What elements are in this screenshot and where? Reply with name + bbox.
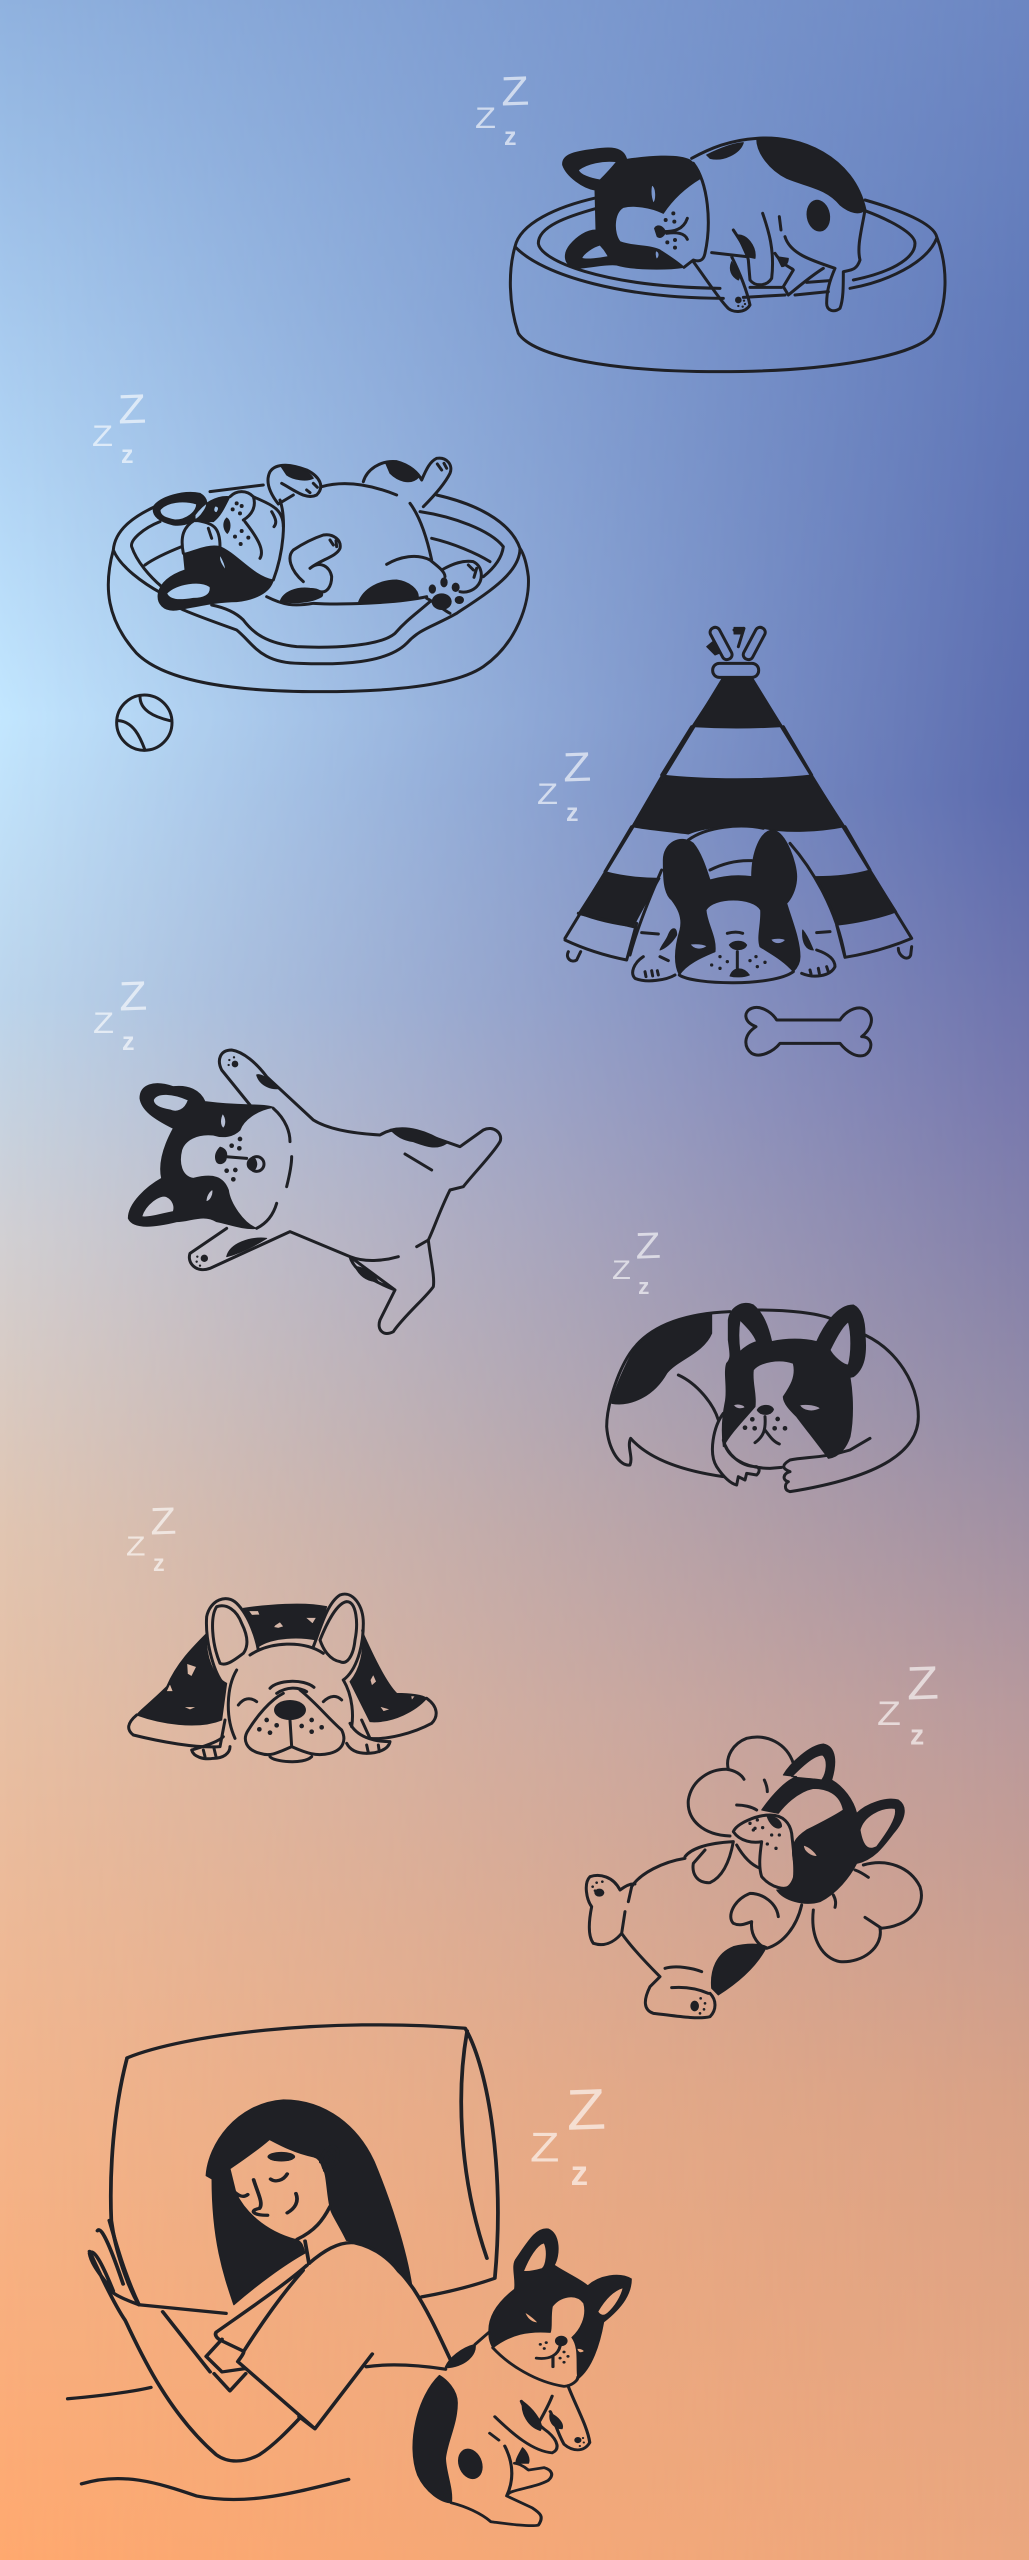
dog body lines xyxy=(451,2332,590,2526)
woman hugging pillow with dog xyxy=(68,2025,631,2526)
teepee poles xyxy=(708,626,767,661)
sleep letters: woman and dog: z xyxy=(571,2154,588,2193)
dog sleeping on back in oval bed with ball xyxy=(108,458,528,750)
dog face xyxy=(493,2346,578,2386)
sleep letters: sprawled dog: Z xyxy=(93,1007,114,1040)
bed xyxy=(108,485,528,692)
curled up sleeping dog xyxy=(607,1303,918,1492)
sleep letters: dog on bone pillow: Z xyxy=(877,1695,901,1733)
teepee stripes xyxy=(578,678,897,927)
teepee feet and ring xyxy=(567,947,912,961)
sleep letters: dog under blanket xyxy=(126,1500,177,1576)
sleep letters: dog on bone pillow xyxy=(877,1656,939,1752)
sleep letters: dog in round bed: Z xyxy=(475,102,496,135)
patch xyxy=(612,1313,712,1404)
dog body patches xyxy=(413,2344,562,2503)
sleep letters: dog under blanket: z xyxy=(153,1550,165,1576)
sleep letters: dog in teepee xyxy=(537,744,592,827)
sleep letters: dog under blanket: Z xyxy=(126,1530,146,1561)
dog head in teepee xyxy=(663,830,800,975)
face xyxy=(757,1405,774,1415)
pillow xyxy=(111,2025,498,2313)
patches xyxy=(227,1075,447,1282)
blanket dark parts with light spots xyxy=(137,1604,427,1725)
sleep letters: dog in round bed xyxy=(475,68,530,151)
spot xyxy=(804,198,833,233)
sleep letters: woman and dog xyxy=(530,2078,607,2193)
dog head xyxy=(563,148,701,269)
face xyxy=(232,2147,338,2263)
sleep letters: dog on bone pillow: z xyxy=(910,1720,924,1752)
dog sleeping on bone pillow xyxy=(586,1737,921,2018)
sleep letters: sprawled dog: Z xyxy=(118,973,148,1019)
head markings xyxy=(762,1744,904,1903)
sleep letters: dog in teepee: Z xyxy=(562,744,592,790)
dog body and paws xyxy=(633,826,835,983)
tennis ball xyxy=(117,695,172,750)
nose and mouth xyxy=(215,1147,227,1164)
muzzle xyxy=(733,1815,795,1888)
sleep letters: sprawled dog xyxy=(93,973,148,1056)
sleep letters: dog in round bed: Z xyxy=(500,68,530,114)
dog head in arms xyxy=(489,2229,631,2379)
bone pillow xyxy=(688,1737,921,1962)
paws xyxy=(591,1880,706,2015)
dog face xyxy=(663,163,708,267)
dog body xyxy=(267,458,481,613)
sleep letters: curled dog: Z xyxy=(635,1225,661,1267)
body, legs and arms xyxy=(586,1842,802,2018)
nose and spots xyxy=(660,929,813,977)
paws xyxy=(192,1723,390,1759)
sleep letters: dog on back in bed: Z xyxy=(117,386,147,432)
head markings xyxy=(128,1084,273,1229)
sleep letters: curled dog: Z xyxy=(612,1255,631,1285)
head face xyxy=(182,492,283,558)
dog outline xyxy=(189,1050,501,1333)
sleep letters: woman and dog: Z xyxy=(565,2078,607,2143)
dog body xyxy=(692,138,865,311)
sprawled sleeping dog xyxy=(128,1050,501,1333)
dog under blanket xyxy=(129,1594,436,1762)
hair xyxy=(206,2100,412,2305)
body patch xyxy=(711,1944,767,1995)
bone xyxy=(746,1007,871,1056)
sleep letters: dog in teepee: Z xyxy=(537,778,558,811)
sleep letters: dog on bone pillow: Z xyxy=(906,1656,939,1709)
bed xyxy=(510,198,945,372)
sleep letters: dog on back in bed xyxy=(92,386,147,469)
sleep letters: sprawled dog: z xyxy=(122,1028,134,1056)
sleep letters: dog in round bed: z xyxy=(504,123,516,151)
teepee outline xyxy=(565,678,912,960)
head and face xyxy=(228,1644,352,1762)
patches xyxy=(280,461,419,603)
sleep letters: dog on back in bed: z xyxy=(121,441,134,469)
sleep letters: dog in teepee: z xyxy=(566,799,578,827)
body patches xyxy=(707,138,865,280)
sleep letters: dog on back in bed: Z xyxy=(92,420,113,453)
shirt and arms xyxy=(68,2220,451,2500)
blanket hem and ears xyxy=(129,1594,436,1747)
sleep letters: woman and dog: Z xyxy=(530,2123,559,2170)
dog sleeping in round bed xyxy=(510,138,945,372)
head markings xyxy=(153,492,273,610)
sleep letters: dog under blanket: Z xyxy=(149,1500,177,1543)
dog in striped teepee with bone xyxy=(565,626,912,1056)
toes xyxy=(307,463,477,577)
body outline xyxy=(607,1310,918,1492)
sleep letters: curled dog: z xyxy=(638,1274,649,1299)
head markings xyxy=(722,1303,866,1458)
paw xyxy=(429,577,464,610)
sleep letters: curled dog xyxy=(612,1225,661,1299)
